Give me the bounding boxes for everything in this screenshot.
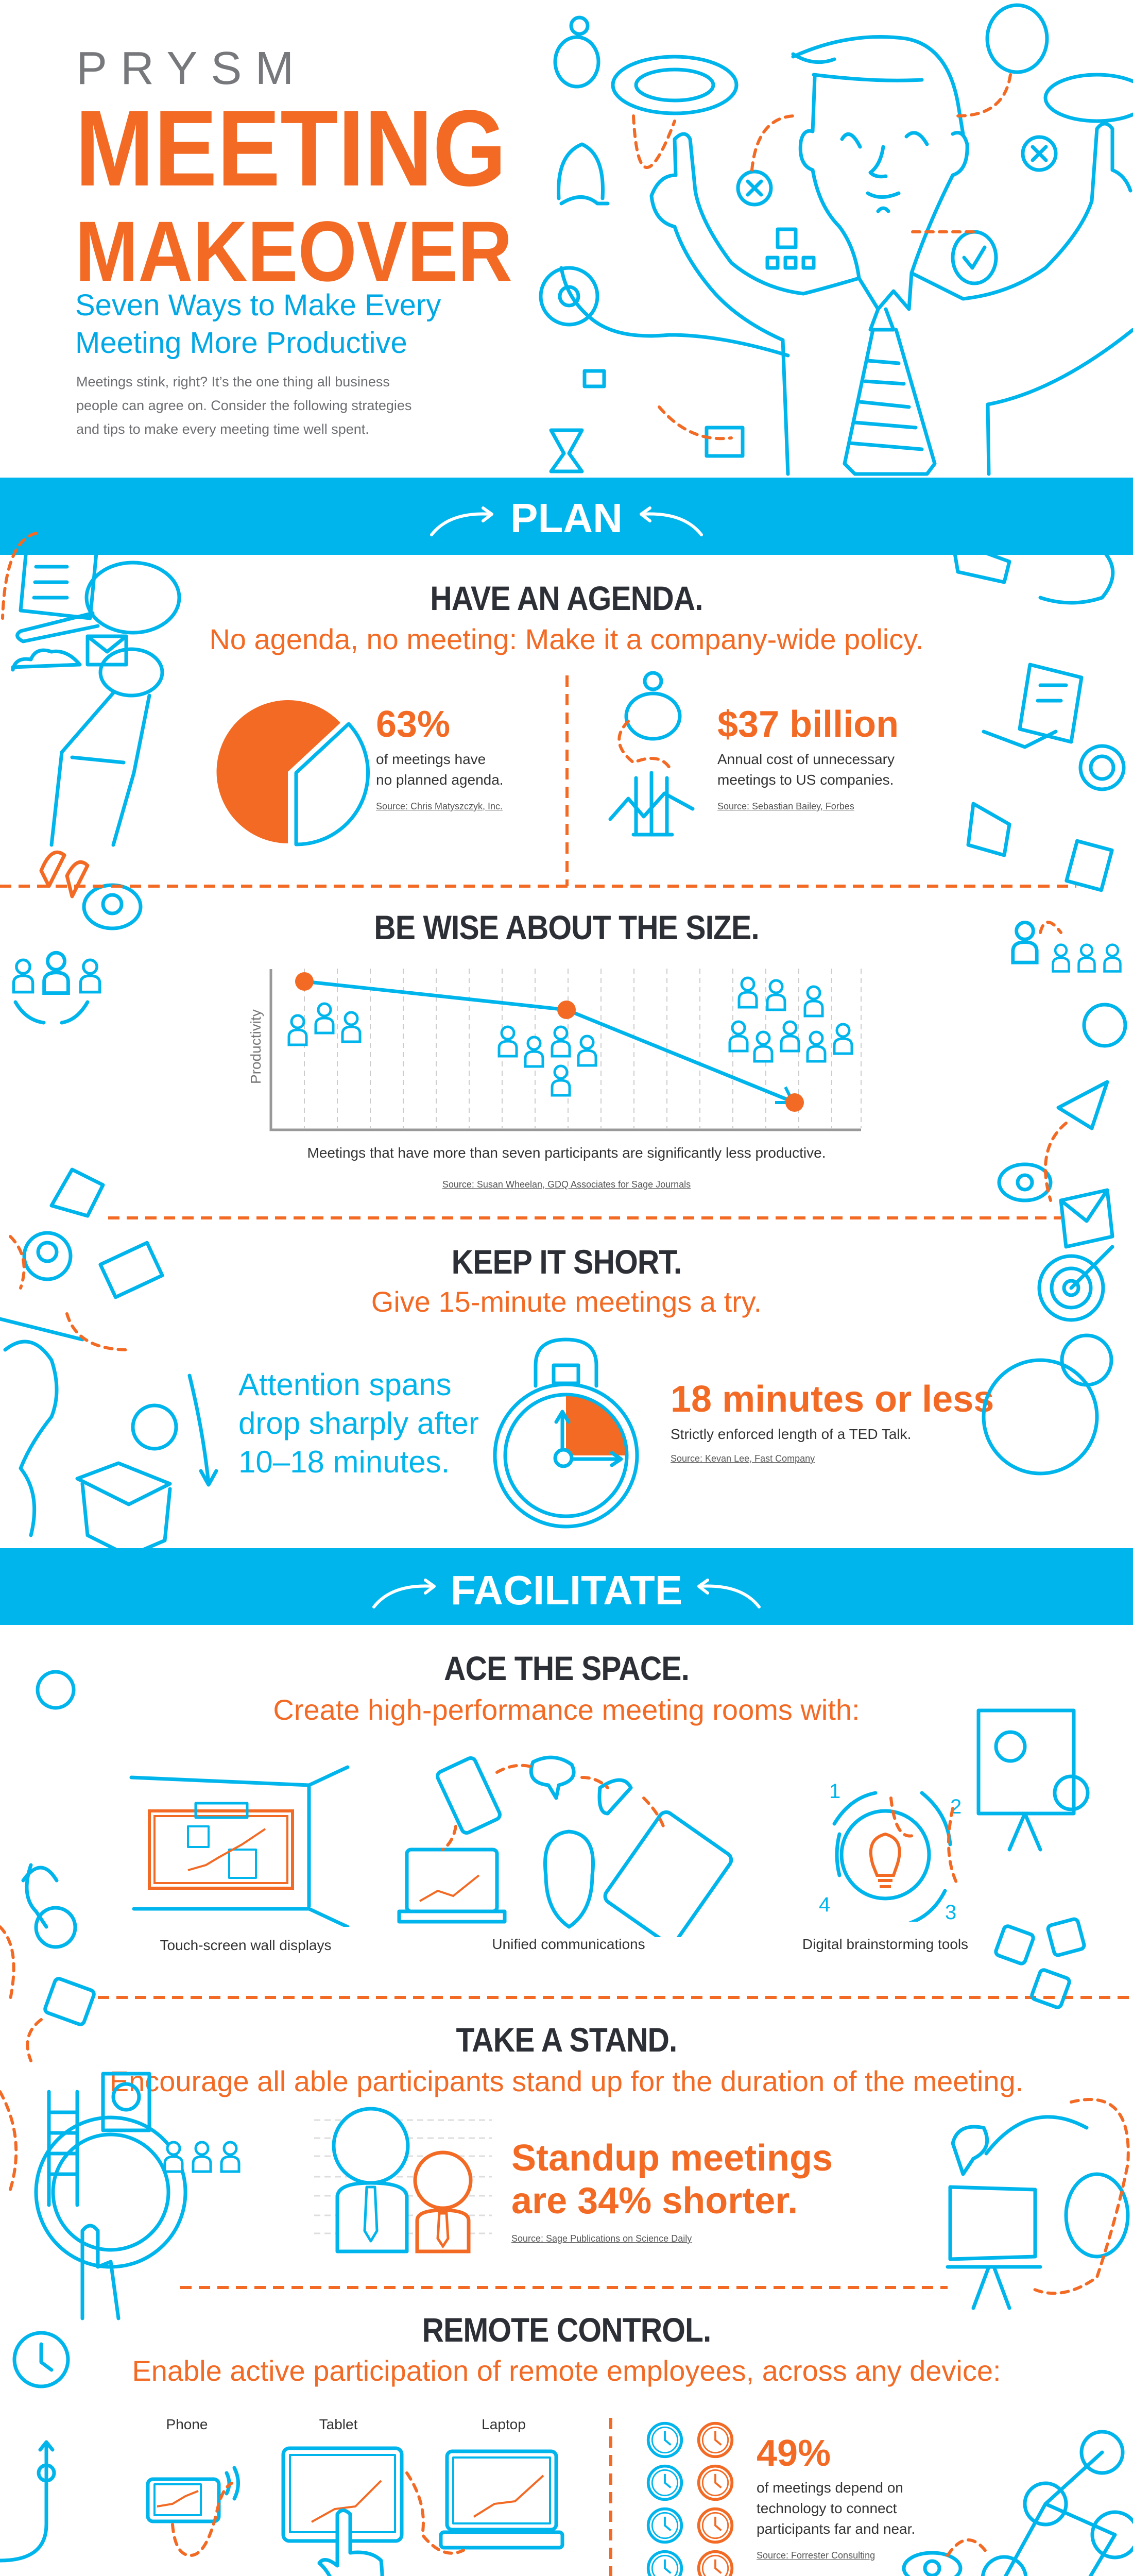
stat: 18 minutes: 18 minutes or less <box>671 1379 994 1420</box>
icon: clocks grid <box>647 2421 733 2576</box>
blue band: plan <box>0 478 1133 555</box>
stat: 49% <box>757 2433 915 2561</box>
subtitle <box>75 289 441 360</box>
header logo: PRYSM <box>76 43 307 94</box>
icon: digital brainstorming: 2 <box>950 1795 962 1818</box>
label: laptop: Laptop <box>482 2416 526 2432</box>
stat: $37 billion: $37 billion <box>717 704 899 745</box>
heading: ace the space: ACE THE SPACE. <box>444 1649 689 1687</box>
heading: take a stand: TAKE A STAND. <box>456 2021 677 2059</box>
stat: 49%: 49% <box>757 2433 831 2474</box>
stat: 18 minutes: Source: Kevan Lee, Fast Company <box>671 1453 815 1464</box>
stat: standup 34%: Source: Sage Publications on Science Daily <box>511 2233 692 2244</box>
axis label: productivity: Productivity <box>248 1009 264 1084</box>
intro text <box>76 374 411 437</box>
intro text: people can agree on. Consider the following strategies <box>76 398 411 413</box>
right doodles plan section <box>953 530 1125 1247</box>
stat: standup 34%: are 34% shorter. <box>511 2180 798 2222</box>
icon: digital brainstorming: 1 <box>829 1780 840 1803</box>
band heading: plan: PLAN <box>510 495 623 541</box>
icon: standing people <box>314 2107 492 2253</box>
title: MAKEOVER <box>75 204 512 299</box>
band heading: facilitate <box>372 1567 761 1613</box>
stat: 63%: 63% <box>376 704 450 745</box>
band heading: plan <box>430 495 703 541</box>
icon: digital brainstorming: 4 <box>819 1893 830 1916</box>
heading: be wise about the size: BE WISE ABOUT THE SIZE. <box>374 908 759 946</box>
stat: 63%: Source: Chris Matyszczyk, Inc. <box>376 801 503 811</box>
heading: have an agenda: HAVE AN AGENDA. <box>430 579 703 617</box>
subheading: agenda: No agenda, no meeting: Make it a company-wide policy. <box>209 623 924 655</box>
stat: 49%: of meetings depend on <box>757 2480 903 2496</box>
stat: standup 34%: Standup meetings <box>511 2138 833 2179</box>
text: attention spans: drop sharply after <box>238 1406 479 1440</box>
stat: 18 minutes <box>671 1379 994 1464</box>
icon: touch-screen wall display <box>130 1765 349 1927</box>
text: attention spans: 10–18 minutes. <box>238 1445 450 1479</box>
icon: piggy bank and arrows <box>609 671 694 837</box>
band heading: facilitate: FACILITATE <box>451 1567 682 1613</box>
label: touch-screen: Touch-screen wall displays <box>160 1937 332 1953</box>
title: MEETING <box>75 88 506 209</box>
stat: 63% <box>376 704 504 811</box>
subheading: stand up: Encourage all able participants stand up for the duration of the meeting. <box>110 2065 1023 2097</box>
icon: stopwatch <box>493 1337 639 1528</box>
intro text: Meetings stink, right? It’s the one thing all business <box>76 374 390 389</box>
illustration: header businessman <box>541 5 1133 474</box>
pie chart 63% <box>216 700 370 846</box>
icon: unified communications <box>398 1756 733 1937</box>
label: tablet: Tablet <box>319 2416 357 2432</box>
subheading: rooms: Create high-performance meeting rooms with: <box>273 1693 860 1726</box>
chart: productivity vs participants <box>270 969 862 1131</box>
left doodle: flying woman <box>13 649 162 1216</box>
stat: 49%: technology to connect <box>757 2500 897 2516</box>
stat: 18 minutes: Strictly enforced length of a TED Talk. <box>671 1426 911 1442</box>
stat: 63%: no planned agenda. <box>376 772 504 788</box>
heading: remote control: REMOTE CONTROL. <box>422 2311 711 2349</box>
title <box>75 88 512 299</box>
chart source: Source: Susan Wheelan, GDQ Associates for Sage Journals <box>442 1179 691 1190</box>
stat: $37 billion: Annual cost of unnecessary <box>717 751 895 767</box>
subheading: remote: Enable active participation of remote employees, across any device: <box>132 2354 1001 2387</box>
chart caption: Meetings that have more than seven participants are significantly less productive. <box>307 1145 826 1161</box>
text: attention spans <box>238 1367 479 1479</box>
stat: standup 34% <box>511 2138 833 2244</box>
subheading: 15 minutes: Give 15-minute meetings a try. <box>371 1285 762 1318</box>
stat: $37 billion <box>717 704 899 811</box>
stat: $37 billion: Source: Sebastian Bailey, Forbes <box>717 801 854 811</box>
stat: $37 billion: meetings to US companies. <box>717 772 894 788</box>
subtitle: Meeting More Productive <box>75 326 407 360</box>
arrow: attention down <box>187 1374 218 1487</box>
stat: 63%: of meetings have <box>376 751 486 767</box>
text: attention spans: Attention spans <box>238 1367 452 1402</box>
label: unified: Unified communications <box>492 1936 645 1952</box>
stat: 49%: participants far and near. <box>757 2521 915 2537</box>
icon: digital brainstorming <box>819 1780 962 1922</box>
left doodles: agenda document and magnifier <box>3 500 179 670</box>
stat: 49%: Source: Forrester Consulting <box>757 2550 875 2561</box>
intro text: and tips to make every meeting time well spent. <box>76 421 369 437</box>
icon: devices <box>146 2446 564 2576</box>
label: brainstorming: Digital brainstorming tools <box>802 1936 968 1952</box>
heading: keep it short: KEEP IT SHORT. <box>452 1243 681 1281</box>
label: phone: Phone <box>166 2416 208 2432</box>
blue band: facilitate <box>0 1548 1133 1625</box>
subtitle: Seven Ways to Make Every <box>75 289 441 322</box>
